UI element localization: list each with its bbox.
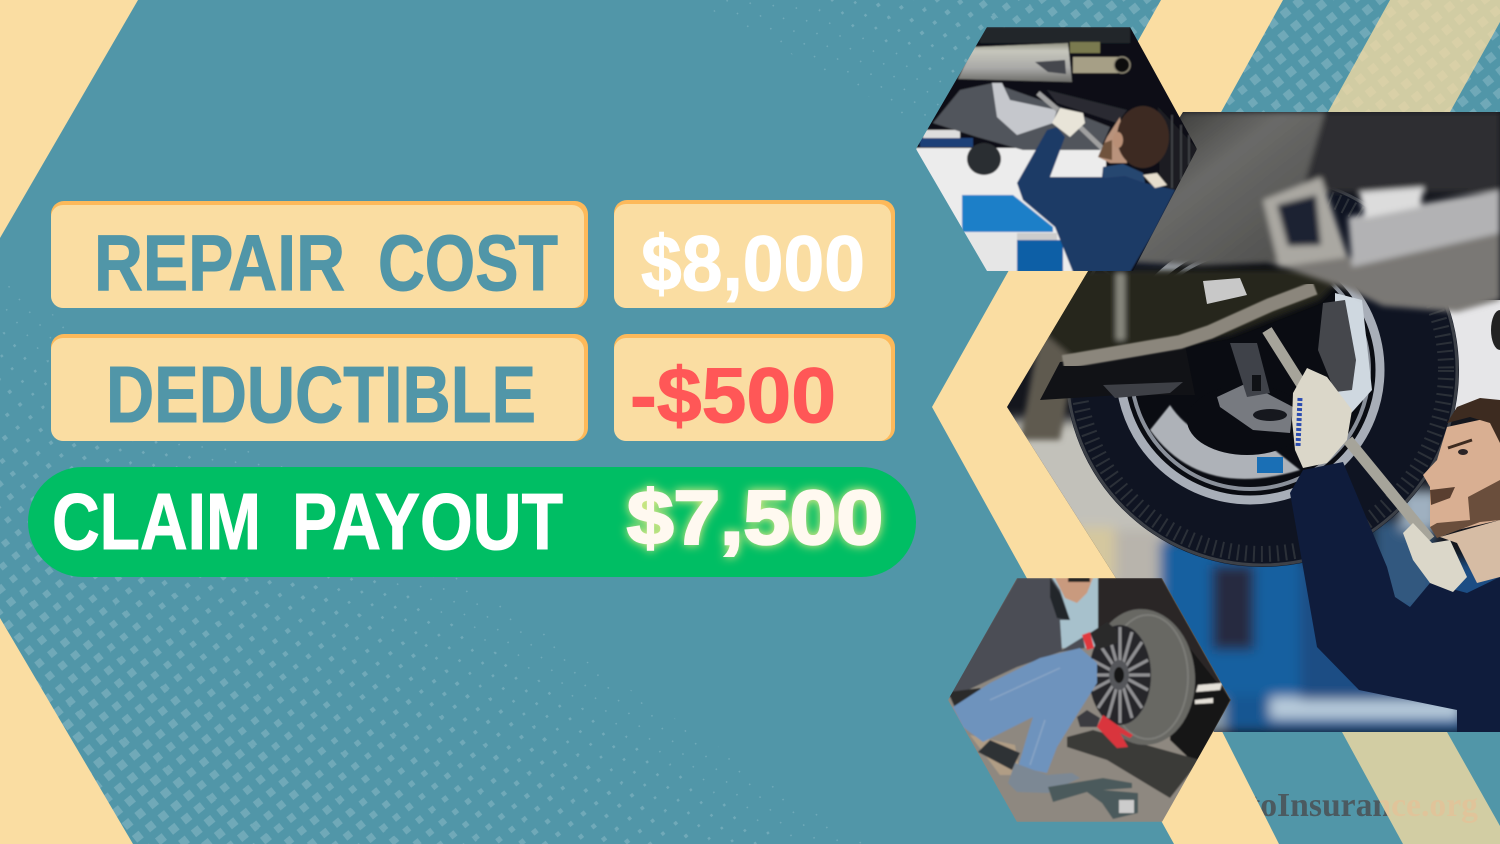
face xyxy=(1098,117,1127,163)
hood collar xyxy=(1050,578,1070,620)
tyre grooves xyxy=(1108,615,1188,739)
rim xyxy=(1089,625,1151,725)
silver inner barrel xyxy=(1150,405,1300,479)
dark object on wall xyxy=(1491,310,1500,350)
muffler xyxy=(1073,57,1125,73)
moustache and mouth xyxy=(1430,487,1455,505)
upper fitting xyxy=(1070,42,1100,53)
small bracket xyxy=(1203,278,1247,304)
watermark: tan part over stripe: AutoInsurance.org xyxy=(1206,787,1478,824)
row: deductible value xyxy=(614,334,895,441)
black arm xyxy=(1047,90,1127,123)
blurred top chassis xyxy=(1130,112,1500,312)
spokes xyxy=(1090,627,1150,723)
row: deductible label xyxy=(51,334,588,441)
hub centre xyxy=(1253,409,1287,421)
dark underbody backdrop xyxy=(916,27,1197,272)
row: repair cost value xyxy=(614,200,895,308)
silver car part xyxy=(992,83,1057,135)
photo: mechanic changing tyre xyxy=(948,578,1231,822)
repair cost amount: $8,000 xyxy=(641,219,865,307)
hair xyxy=(1117,106,1169,168)
eye xyxy=(1458,449,1468,455)
black underbody box xyxy=(1040,356,1134,400)
row: repair cost label xyxy=(51,201,588,308)
translucent stripe: bottom right xyxy=(1342,732,1500,844)
large tyre xyxy=(1158,107,1197,190)
watermark: dark part: AutoInsurance.org xyxy=(1206,787,1478,824)
mechanic jacket xyxy=(1290,462,1500,732)
payout text: PAYOUT xyxy=(292,477,563,566)
cost text: COST xyxy=(378,218,558,307)
jacket collar xyxy=(1103,164,1145,183)
lower glove xyxy=(1403,523,1467,592)
white spots xyxy=(1195,683,1222,704)
wheel rim xyxy=(1120,240,1380,500)
jeans seam xyxy=(990,668,1060,765)
wrench xyxy=(1038,93,1102,148)
mechanic beard xyxy=(1430,480,1500,538)
tyre xyxy=(1069,306,1459,567)
deductible text: DEDUCTIBLE xyxy=(106,350,536,439)
muffler opening xyxy=(1114,57,1130,73)
hair xyxy=(1068,578,1090,582)
head xyxy=(1055,578,1093,603)
deductible amount: -$500 xyxy=(630,351,836,439)
exhaust pipe xyxy=(958,43,1072,82)
dark lower wheel well xyxy=(1170,627,1231,765)
eyebrow xyxy=(1448,440,1472,448)
lower forearm xyxy=(1077,710,1100,727)
repair text: REPAIR xyxy=(94,218,345,307)
cabinet top xyxy=(1017,233,1057,240)
mechanic hair xyxy=(1447,398,1500,443)
mechanic face xyxy=(1423,417,1500,537)
brake caliper xyxy=(1318,300,1356,392)
blurred garage background xyxy=(1005,420,1500,732)
tyre tread xyxy=(1172,115,1189,188)
claim text: CLAIM xyxy=(52,477,261,566)
jacket xyxy=(1017,127,1175,272)
blue car stripe xyxy=(920,138,973,147)
ramp xyxy=(1067,730,1200,798)
tyre edge xyxy=(1067,175,1457,565)
white car strip xyxy=(923,130,960,140)
corner shape: bottom left xyxy=(0,618,133,844)
power drill xyxy=(1048,778,1138,819)
beard xyxy=(1098,140,1112,160)
collar fleece xyxy=(1143,173,1167,188)
brake disc xyxy=(1187,423,1277,455)
halftone dots: upper right xyxy=(693,0,1500,444)
mechanic neck xyxy=(1440,520,1500,583)
photo base xyxy=(1000,112,1500,732)
hub xyxy=(1109,660,1129,690)
upper glove xyxy=(1292,368,1352,468)
blue machine xyxy=(962,195,1053,232)
ear xyxy=(1113,132,1123,148)
jeans xyxy=(953,648,1097,773)
hub centre xyxy=(1114,667,1124,683)
tyre tread xyxy=(1078,186,1446,554)
exhaust pipe xyxy=(1063,288,1315,362)
wheel arch xyxy=(1098,578,1231,720)
corner shape: top left xyxy=(0,0,138,238)
tyre xyxy=(1086,606,1200,748)
white cabinet xyxy=(965,233,1017,272)
rim inner line xyxy=(1131,251,1369,489)
front shoe xyxy=(1008,763,1080,793)
hoodie xyxy=(948,578,1085,697)
blue cabinet xyxy=(1017,240,1063,272)
photo: large mechanic under car xyxy=(1000,112,1500,732)
floor xyxy=(948,578,1231,822)
back shoe xyxy=(978,740,1020,770)
hub xyxy=(1217,383,1293,433)
small background tyre xyxy=(967,143,1001,175)
arm slot xyxy=(1252,375,1261,391)
photo: mechanic working under lift xyxy=(916,27,1197,272)
light blue car body xyxy=(1040,578,1113,648)
claim payout amount: $7,500 xyxy=(627,476,883,561)
glove dots xyxy=(1298,398,1300,447)
row: claim payout pill xyxy=(28,467,916,577)
red cuff xyxy=(1082,632,1094,650)
white garage wall xyxy=(916,148,1106,272)
belt xyxy=(948,688,985,708)
underbody box edge xyxy=(1103,382,1183,398)
top band xyxy=(980,27,1130,43)
halftone dots: lower left xyxy=(0,280,868,844)
car underside xyxy=(933,83,1110,150)
tan floor patch xyxy=(970,735,1020,775)
blue gap in rim xyxy=(1257,457,1283,473)
light gap right of brake xyxy=(1335,293,1372,420)
cream chevron xyxy=(932,0,1283,844)
wrench xyxy=(1267,330,1430,540)
glove xyxy=(1052,108,1085,137)
upper glove xyxy=(1090,622,1117,650)
suspension arm xyxy=(1230,343,1270,397)
translucent stripe: top right xyxy=(1328,0,1500,112)
drill battery label xyxy=(1119,800,1134,813)
upper dark chassis xyxy=(1020,270,1350,440)
lower red glove xyxy=(1097,715,1133,748)
pipe shadow xyxy=(1035,60,1066,74)
white wall right of wheel xyxy=(1448,300,1500,411)
